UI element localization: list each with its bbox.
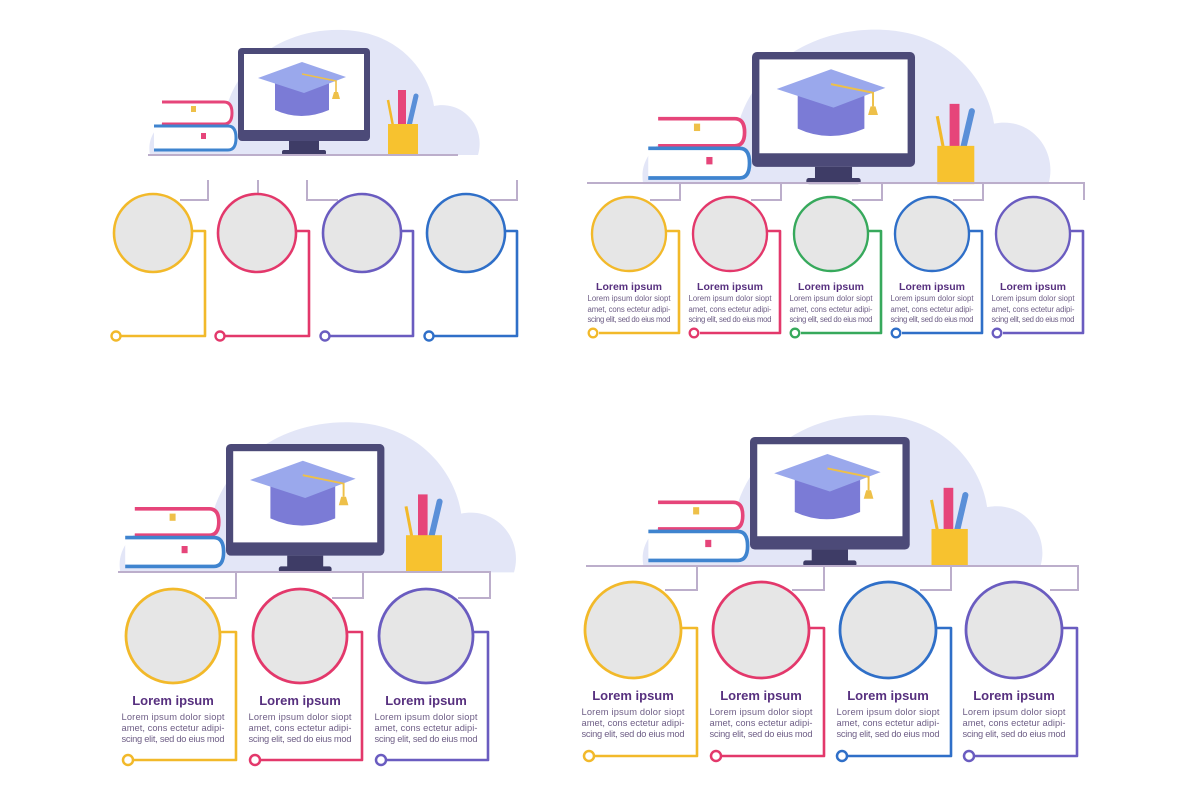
step 2 pink: Lorem ipsum xyxy=(720,688,802,703)
step 3 purple: Lorem ipsum xyxy=(385,693,467,708)
step 1 yellow: amet, cons ectetur adipi- xyxy=(582,718,684,728)
step 3 green: amet, cons ectetur adipi- xyxy=(790,305,873,314)
step 3 purple: Lorem ipsum dolor siopt xyxy=(374,712,478,722)
step 2 pink: amet, cons ectetur adipi- xyxy=(248,723,352,733)
step 1 yellow: Lorem ipsum dolor siopt xyxy=(582,707,685,717)
step 1 yellow: scing elit, sed do eius mod xyxy=(582,729,684,739)
step 1 yellow xyxy=(582,582,697,761)
panel: three-step diagram (bottom left) xyxy=(118,422,516,765)
step 3 blue xyxy=(836,582,951,761)
step 1 yellow xyxy=(122,589,236,765)
illustration: computer with graduation cap xyxy=(120,422,516,572)
step 4 purple: Lorem ipsum dolor siopt xyxy=(962,707,1066,717)
step 1 yellow: Lorem ipsum xyxy=(596,281,662,293)
step 2 pink: scing elit, sed do eius mod xyxy=(248,734,352,744)
step 1 yellow: scing elit, sed do eius mod xyxy=(122,734,224,744)
step 3 purple xyxy=(374,589,488,765)
step 1 yellow xyxy=(588,197,679,337)
step 3 green: Lorem ipsum xyxy=(798,281,864,293)
step 3 green xyxy=(790,197,881,337)
step 3 purple: amet, cons ectetur adipi- xyxy=(374,723,478,733)
step 2 pink xyxy=(688,197,780,337)
step 4 blue: Lorem ipsum dolor siopt xyxy=(890,294,974,303)
panel: five-step diagram (top right) xyxy=(587,30,1084,337)
step 4 purple: amet, cons ectetur adipi- xyxy=(962,718,1066,728)
step 3 purple xyxy=(320,194,413,340)
illustration: computer with graduation cap xyxy=(643,30,1050,184)
step 4 purple: Lorem ipsum xyxy=(973,688,1055,703)
step 5 purple: amet, cons ectetur adipi- xyxy=(992,305,1075,314)
step 5 purple: Lorem ipsum xyxy=(1000,281,1066,293)
step 4 blue xyxy=(424,194,517,340)
step 4 purple xyxy=(962,582,1077,761)
step 2 pink: amet, cons ectetur adipi- xyxy=(688,305,772,314)
step 2 pink: Lorem ipsum dolor siopt xyxy=(688,294,772,303)
step 2 pink: Lorem ipsum dolor siopt xyxy=(710,707,813,717)
step 1 yellow: amet, cons ectetur adipi- xyxy=(588,305,671,314)
step 1 yellow: Lorem ipsum dolor siopt xyxy=(588,294,671,303)
illustration: computer with graduation cap xyxy=(149,30,480,155)
step 3 blue: amet, cons ectetur adipi- xyxy=(836,718,940,728)
step 4 blue: scing elit, sed do eius mod xyxy=(890,315,974,324)
panel: four-step diagram with text (bottom right) xyxy=(582,415,1078,761)
step 5 purple xyxy=(992,197,1083,337)
illustration: computer with graduation cap xyxy=(643,415,1042,566)
step 3 blue: Lorem ipsum dolor siopt xyxy=(836,707,940,717)
step 2 pink xyxy=(710,582,824,761)
step 3 green: scing elit, sed do eius mod xyxy=(790,315,872,324)
step 2 pink: scing elit, sed do eius mod xyxy=(710,729,812,739)
step 2 pink: Lorem ipsum xyxy=(697,281,763,293)
step 1 yellow: amet, cons ectetur adipi- xyxy=(122,723,224,733)
step 5 purple: scing elit, sed do eius mod xyxy=(992,315,1074,324)
step 2 pink: scing elit, sed do eius mod xyxy=(688,315,772,324)
step 3 blue: scing elit, sed do eius mod xyxy=(836,729,940,739)
step 4 blue xyxy=(890,197,982,337)
step 3 purple: scing elit, sed do eius mod xyxy=(374,734,478,744)
step 4 blue: amet, cons ectetur adipi- xyxy=(890,305,974,314)
step 1 yellow: Lorem ipsum dolor siopt xyxy=(122,712,225,722)
step 5 purple: Lorem ipsum dolor siopt xyxy=(992,294,1075,303)
step 3 blue: Lorem ipsum xyxy=(847,688,929,703)
step 2 pink: Lorem ipsum dolor siopt xyxy=(248,712,352,722)
panel: four-step diagram (top left) xyxy=(112,30,517,340)
step 2 pink xyxy=(248,589,362,765)
step 1 yellow: Lorem ipsum xyxy=(132,693,214,708)
step 3 green: Lorem ipsum dolor siopt xyxy=(790,294,873,303)
step 2 pink xyxy=(216,194,309,340)
step 4 purple: scing elit, sed do eius mod xyxy=(962,729,1066,739)
step 2 pink: Lorem ipsum xyxy=(259,693,341,708)
step 2 pink: amet, cons ectetur adipi- xyxy=(710,718,812,728)
step 1 yellow xyxy=(112,194,205,340)
step 4 blue: Lorem ipsum xyxy=(899,281,965,293)
step 1 yellow: Lorem ipsum xyxy=(592,688,674,703)
step 1 yellow: scing elit, sed do eius mod xyxy=(588,315,670,324)
